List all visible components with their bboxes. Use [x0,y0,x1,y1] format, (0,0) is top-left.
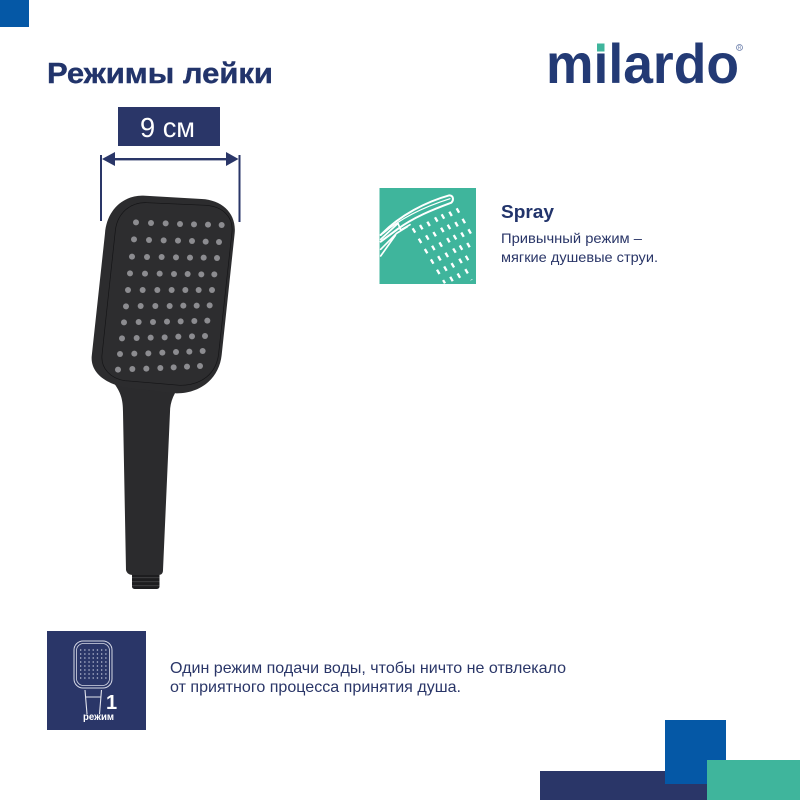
nozzle dots [115,219,225,373]
mode caption: режим [83,712,114,723]
icon: one mode badge [47,631,146,730]
bottom description: от приятного процесса принятия душа. [170,679,461,696]
corner accent square [0,0,29,27]
bottom description: Один режим подачи воды, чтобы ничто не отвлекало [170,660,566,677]
icon: spray mode [380,188,476,284]
logo: milardo: R [738,46,742,52]
title: Режимы лейки [47,58,273,90]
Spray description: мягкие душевые струи. [501,249,658,265]
head body [92,196,235,393]
handle outline [85,690,102,714]
bottom description [170,660,566,696]
dimension arrow [100,152,240,222]
handle [113,382,183,575]
head outline [74,641,112,688]
water dashes [413,208,472,283]
corner decoration blocks [540,720,800,800]
mode number: 1 [106,692,117,714]
head dots [80,650,107,678]
Spray description [501,230,658,265]
Spray description: Привычный режим – [501,230,642,246]
dimension label: 9 см [118,107,220,146]
handle thread [132,572,160,589]
logo: milardo: milardo [546,32,739,95]
dimension label: 9 см: 9 см [140,112,195,143]
Spray heading: Spray [501,202,554,222]
shower outline [381,195,453,242]
shower head product [92,196,235,589]
